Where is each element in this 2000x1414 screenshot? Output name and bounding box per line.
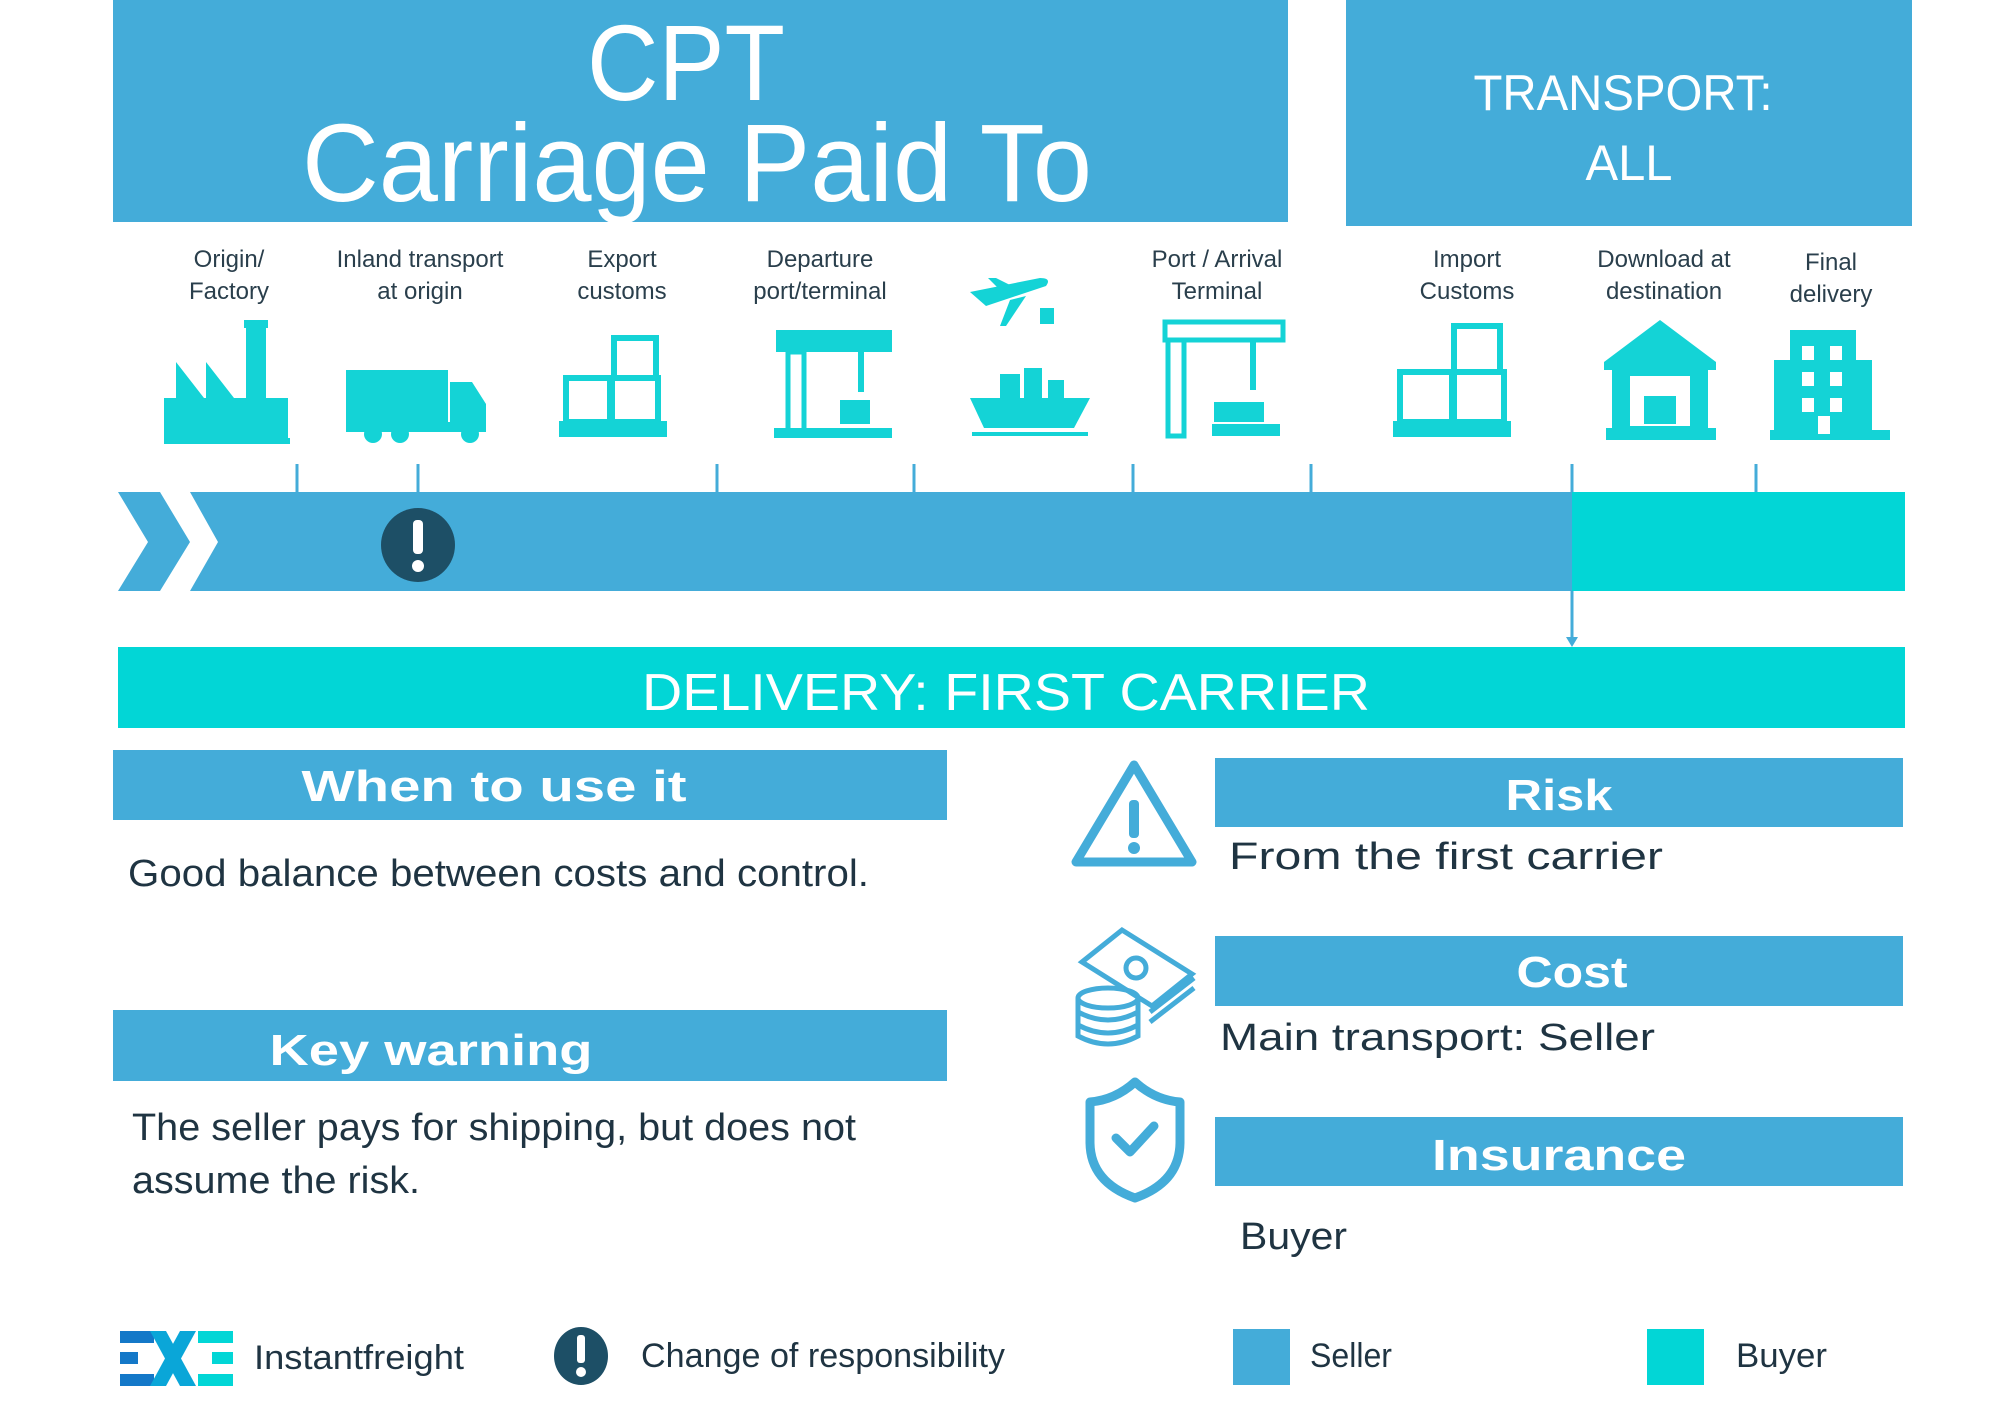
panel: risk: Risk [1506, 771, 1613, 820]
arrow [1566, 591, 1578, 647]
timeline bar [118, 492, 1905, 591]
stage labels: customs [577, 278, 667, 305]
panel: insurance: Insurance [1432, 1131, 1686, 1180]
panel: cost: Main transport: Seller [1220, 1017, 1655, 1059]
panel: key warning: assume the risk. [132, 1160, 420, 1202]
icon: warning triangle [1076, 765, 1192, 862]
panel: when to use it: When to use it [302, 762, 687, 811]
stage labels: Export [587, 246, 657, 273]
icon: truck [346, 370, 486, 443]
title [113, 0, 1288, 225]
delivery banner: DELIVERY: FIRST CARRIER [642, 664, 1370, 722]
icon: import boxes [1396, 326, 1508, 434]
icon: shield [1090, 1082, 1180, 1198]
panel: key warning [113, 1010, 947, 1202]
panel: insurance: Buyer [1240, 1216, 1347, 1258]
transport panel: ALL [1586, 135, 1672, 191]
panel: key warning: Key warning [270, 1026, 592, 1075]
title: Carriage Paid To [302, 102, 1092, 225]
legend [120, 1327, 1827, 1386]
panel: when to use it: Good balance between costs and control. [128, 853, 869, 895]
ticks [297, 464, 1756, 492]
transport panel: TRANSPORT: [1474, 65, 1772, 121]
stage labels: Departure [767, 246, 873, 273]
stage labels: destination [1606, 278, 1722, 305]
panel: key warning: The seller pays for shipping, but does not [132, 1107, 856, 1149]
icon: plane and ship [970, 278, 1090, 436]
logo: instantfreight: Instantfreight [254, 1339, 465, 1377]
stage labels: Final [1805, 249, 1857, 276]
stage labels: Inland transport [337, 246, 504, 273]
icon: building [1770, 330, 1890, 440]
legend: buyer: Buyer [1736, 1337, 1827, 1375]
icon: money [1078, 930, 1194, 1044]
stage labels: at origin [377, 278, 463, 305]
icon: factory [164, 320, 290, 444]
legend: change of responsibility [554, 1327, 1005, 1385]
legend: seller: Seller [1310, 1337, 1392, 1375]
legend: seller [1233, 1329, 1392, 1385]
icon: export boxes [562, 338, 664, 434]
panel: cost [1215, 936, 1903, 1059]
legend: change of responsibility: Change of responsibility [641, 1337, 1005, 1375]
stage labels: Port / Arrival [1152, 246, 1282, 273]
panel: when to use it [113, 750, 947, 895]
stage labels [189, 246, 1872, 308]
panel: risk: From the first carrier [1229, 836, 1663, 878]
delivery banner [118, 647, 1905, 728]
icon: change of responsibility marker [381, 508, 455, 582]
transport panel [1346, 0, 1912, 226]
stage labels: port/terminal [753, 278, 887, 305]
logo: instantfreight [120, 1331, 465, 1386]
stage labels: delivery [1790, 281, 1872, 308]
panel: insurance [1215, 1117, 1903, 1258]
stage labels: Import [1433, 246, 1501, 273]
legend: buyer [1647, 1329, 1827, 1385]
title: CPT [587, 2, 785, 123]
stage labels: Origin/ [194, 246, 265, 273]
stage labels: Factory [189, 278, 269, 305]
icon: departure crane [774, 330, 892, 438]
stage labels: Download at [1597, 246, 1731, 273]
stage labels: Terminal [1172, 278, 1262, 305]
stage labels: Customs [1420, 278, 1514, 305]
icon: warehouse [1604, 320, 1716, 440]
panel: cost: Cost [1516, 948, 1628, 997]
panel: risk [1215, 758, 1903, 878]
icon: arrival crane [1165, 322, 1283, 436]
